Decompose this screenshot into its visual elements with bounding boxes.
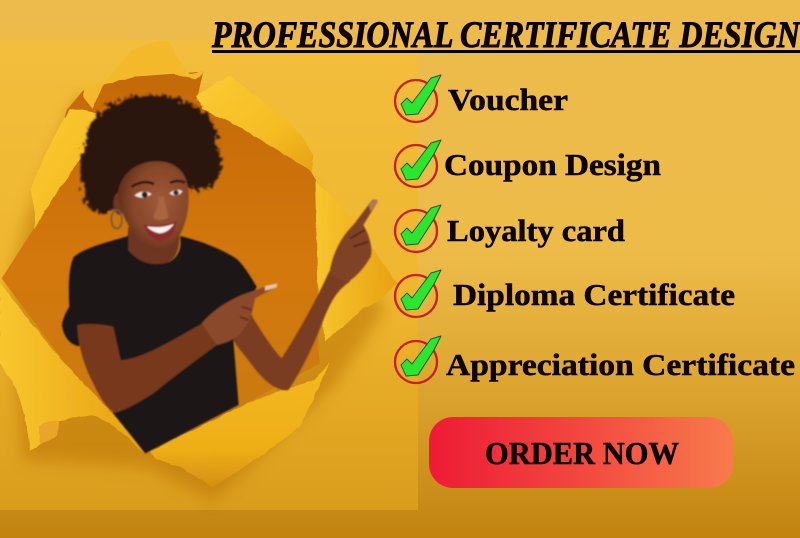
paper shadow (7, 97, 387, 500)
ear (113, 192, 125, 215)
item: Voucher: Voucher (448, 82, 568, 117)
hair (80, 95, 222, 213)
eyes (134, 192, 152, 198)
item: Diploma Certificate (395, 270, 735, 317)
curls (0, 41, 397, 487)
raised hand (330, 199, 377, 282)
item: Loyalty card: Loyalty card (447, 213, 625, 248)
near hand (202, 283, 277, 345)
order now button (429, 417, 733, 488)
curl: upper right (196, 77, 313, 172)
curl: left (31, 110, 107, 229)
person (62, 95, 377, 453)
item: Voucher (395, 75, 568, 122)
earring (111, 210, 122, 229)
order now button: ORDER NOW (485, 435, 679, 471)
checklist (395, 75, 795, 383)
item: Coupon Design (395, 140, 661, 187)
curl: bottom right (149, 362, 329, 487)
item: Loyalty card (395, 205, 625, 252)
curl inner shade (38, 421, 59, 445)
item: Coupon Design: Coupon Design (444, 147, 661, 182)
curl: bottom left (0, 283, 145, 454)
curl: right (315, 182, 397, 342)
near forearm (77, 323, 217, 413)
item: Appreciation Certificate: Appreciation Certificate (446, 347, 795, 382)
mouth (143, 221, 177, 241)
black t-shirt (62, 236, 257, 453)
nose (154, 197, 168, 220)
photo: woman in torn paper (0, 40, 418, 510)
upper arm pointing (233, 257, 350, 390)
curl: top (83, 41, 206, 108)
orange hole (2, 72, 320, 454)
face (118, 161, 189, 250)
torn paper backdrop (0, 40, 418, 510)
item: Appreciation Certificate (395, 336, 795, 383)
eyebrows (132, 181, 185, 187)
item: Diploma Certificate: Diploma Certificate (453, 277, 735, 312)
neck (127, 227, 179, 265)
